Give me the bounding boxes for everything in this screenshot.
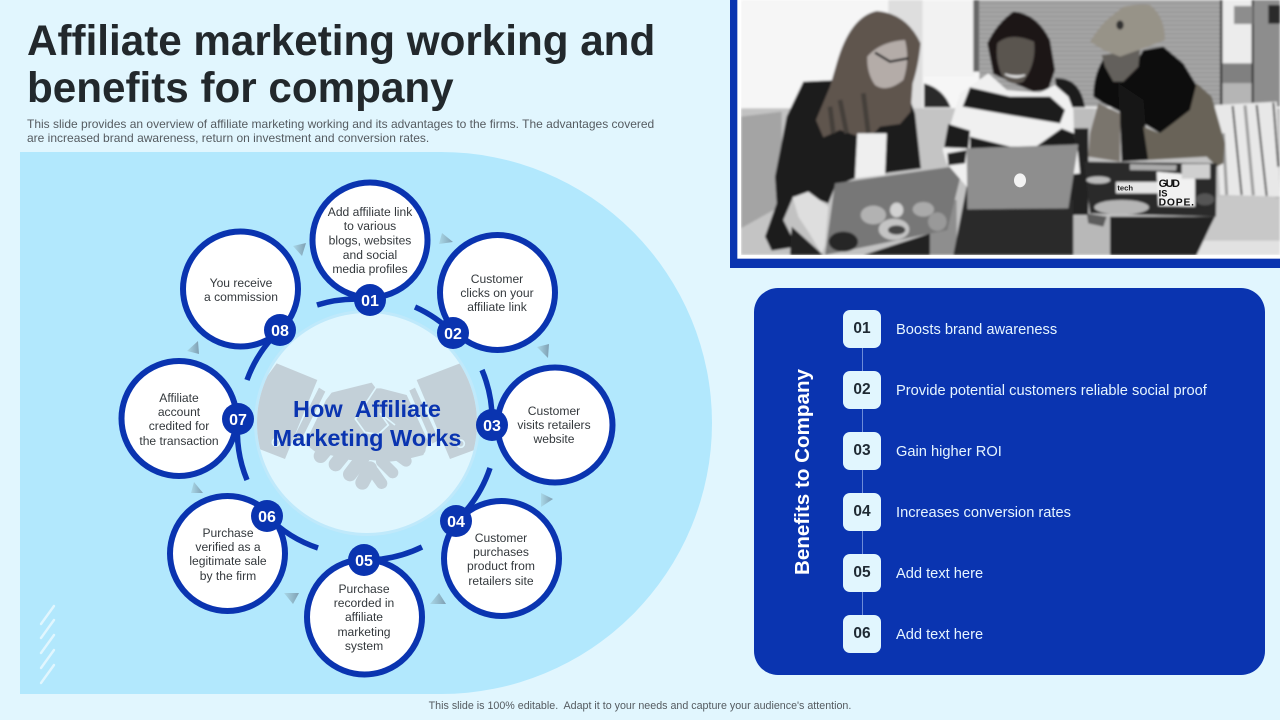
center heading: How Affiliate [293,396,441,422]
step 02: affiliate link [467,300,528,314]
step 05: marketing [337,625,391,639]
wall and window [742,2,1114,110]
benefit 01 [843,310,1057,348]
vertical heading: Benefits to Company [790,369,814,575]
center heading [273,396,461,451]
sofa [741,108,1280,255]
step 07: credited for [149,419,209,433]
panel: how affiliate marketing works cycle [20,152,712,694]
step 05: system [345,639,383,653]
step 01 [312,182,428,316]
laptop logo and sticker text: tech [1117,184,1133,193]
photo: three women with laptops [730,0,1280,268]
description text [27,117,654,145]
step 02: Customer [471,272,523,286]
step 02: 02 [444,326,462,343]
decorative hatch icon [41,606,54,683]
benefit 05: Add text here [896,566,983,582]
benefit 04: 04 [853,503,871,520]
benefit 06 [843,615,983,653]
striped pillow [1215,102,1280,197]
step 03: website [532,432,575,446]
step 03 [476,368,612,482]
background half-round panel [20,152,712,694]
footer note: This slide is 100% editable. Adapt it to your needs and capture your audience's attention. [429,700,851,712]
step 08: You receive [210,276,273,290]
middle laptop [967,144,1078,209]
step 01: media profiles [332,262,408,276]
step 05 [307,544,422,674]
benefit 02 [843,371,1207,409]
benefit 04 [843,493,1071,531]
title [27,17,655,111]
benefit 06: Add text here [896,627,983,643]
step 04: Customer [475,531,527,545]
step 01: to various [344,219,396,233]
benefit 02: 02 [853,381,871,398]
description text: are increased brand awareness, return on investment and conversion rates. [27,131,429,145]
step 06: by the firm [200,569,256,583]
step 04: retailers site [468,574,534,588]
step 03: 03 [483,418,501,435]
laptop logo and sticker text: DOPE. [1159,197,1194,208]
step 08: 08 [271,323,289,340]
step 07: 07 [229,412,247,429]
center heading: Marketing Works [273,425,461,451]
left woman [765,80,921,251]
benefit 01: Boosts brand awareness [896,322,1057,338]
benefit 05: 05 [853,564,871,581]
step 07: account [158,405,201,419]
left laptop [825,165,963,255]
laptop logo and sticker text [1014,173,1194,208]
title: Affiliate marketing working and [27,17,655,64]
step 03: Customer [528,404,580,418]
step 07: Affiliate [159,391,199,405]
arrows between steps [187,233,553,604]
step 06: Purchase [202,526,254,540]
step 06: verified as a [195,540,261,554]
step 06: legitimate sale [189,554,267,568]
step 05: 05 [355,553,373,570]
benefit 01: 01 [853,320,871,337]
step 04: product from [467,559,535,573]
step 01: Add affiliate link [328,205,413,219]
step 04: 04 [447,514,465,531]
laptop logo and sticker text: GUD [1159,178,1180,190]
chairs behind [924,83,951,107]
center circle with handshake and heading [253,310,483,536]
step 05: recorded in [334,596,394,610]
title: benefits for company [27,64,454,111]
right woman [1093,47,1197,133]
step 07 [122,361,254,480]
step 01: blogs, websites [329,234,411,248]
step 03: visits retailers [517,418,591,432]
step 02 [415,235,555,350]
description text: This slide provides an overview of affiliate marketing working and its advantages to the firms. The advantages covered [27,117,654,131]
step 06 [170,496,318,611]
right laptop [1084,162,1217,217]
benefit 06: 06 [853,625,871,642]
icon: handshake [253,363,483,483]
step 02: clicks on your [460,286,534,300]
step 04: purchases [473,545,529,559]
benefit 03: 03 [853,442,871,459]
step 04 [440,468,559,616]
benefit 03: Gain higher ROI [896,444,1002,460]
step 01: 01 [361,293,379,310]
step 08: a commission [204,290,278,304]
step 05: affiliate [345,610,383,624]
middle woman [987,12,1055,92]
panel: benefits to company [754,288,1265,675]
step 05: Purchase [338,582,390,596]
laptop logo and sticker text: IS [1159,188,1167,198]
step 01: and social [343,248,397,262]
step 06: 06 [258,509,276,526]
step 07: the transaction [139,434,219,448]
benefit 05 [843,554,983,592]
step 08 [183,232,298,380]
benefit 02: Provide potential customers reliable social proof [896,383,1207,399]
benefit 03 [843,432,1002,470]
benefit 04: Increases conversion rates [896,505,1071,521]
